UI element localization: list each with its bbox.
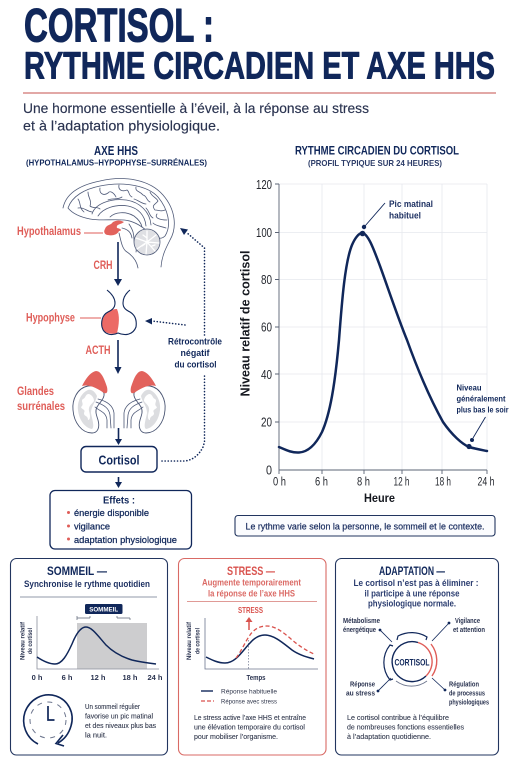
badge: sommeil: SOMMEIL: [89, 607, 118, 614]
subtitle: Une hormone essentielle à l’éveil, à la réponse au stress: [23, 100, 369, 116]
left kidney: [73, 371, 114, 433]
text: adaptation: Le cortisol contribue à l’équilibre: [347, 713, 449, 722]
line chart: cortisol 24 h: 100: [256, 226, 272, 240]
heading: rythme circadien: [295, 144, 459, 168]
line chart: cortisol 24 h: 0 h: [273, 476, 286, 488]
icon: pituitary gland: [102, 290, 136, 335]
heading: adaptation: ADAPTATION —: [379, 564, 445, 578]
line chart: sommeil: 12 h: [90, 673, 106, 682]
heading: axe HHS: [26, 144, 207, 168]
line chart: cortisol 24 h: 12 h: [394, 476, 410, 488]
line chart: stress: Temps: [246, 673, 266, 682]
heading: stress: la réponse de l’axe HHS: [208, 588, 295, 598]
panel: rythme circadien: [235, 144, 509, 536]
line chart: cortisol 24 h: 20: [261, 416, 272, 430]
heading: axe HHS: (HYPOTHALAMUS–HYPOPHYSE–SURRÉNALES): [26, 158, 207, 168]
line chart: sommeil: 6 h: [62, 673, 73, 682]
heading: sommeil: Synchronise le rythme quotidien: [24, 579, 150, 589]
text: adaptation: de nombreuses fonctions essentielles: [347, 722, 464, 732]
label: glandes surrénales: [17, 384, 65, 413]
labels: functions: au stress: [346, 690, 375, 698]
label: rétrocontrôle: négatif: [180, 348, 210, 359]
line chart: sommeil: 24 h: [147, 673, 163, 682]
line chart: cortisol 24 h: 8 h: [357, 476, 370, 488]
heading: stress: [202, 564, 301, 598]
text: stress: [194, 713, 306, 741]
box: effets: énergie disponible: [74, 508, 149, 519]
arrow: negative feedback: [145, 228, 204, 461]
text: stress: pour mobiliser l’organisme.: [194, 732, 278, 741]
label: hypophyse: Hypophyse: [26, 312, 75, 324]
label: rétrocontrôle: [168, 336, 222, 370]
legend: stress: [201, 688, 278, 706]
labels: functions: et attention: [453, 627, 485, 634]
panel: sommeil: [10, 558, 168, 755]
line chart: sommeil: de cortisol: [27, 628, 34, 654]
line chart: cortisol 24 h: [256, 178, 494, 488]
panel: adaptation: [336, 558, 498, 755]
diagram: cortisol ring: CORTISOL: [394, 658, 430, 668]
legend: stress: Réponse habituelle: [221, 688, 277, 696]
box: cortisol: Cortisol: [98, 454, 140, 468]
box: effets: [50, 490, 192, 549]
y axis title: Niveau relatif de cortisol: [238, 250, 252, 396]
text: sommeil: la nuit.: [85, 730, 107, 740]
diagram: cortisol ring: [384, 633, 437, 686]
heading: rythme circadien: RYTHME CIRCADIEN DU CORTISOL: [295, 144, 459, 158]
note box: [235, 516, 495, 536]
labels: functions: énergétique: [343, 627, 376, 634]
line chart: cortisol 24 h: 40: [261, 368, 272, 382]
box: effets: vigilance: [74, 522, 110, 532]
connectors: [377, 622, 450, 692]
x axis title: Heure: [364, 493, 395, 505]
label and arrow: stress: [238, 605, 263, 630]
heading: stress: STRESS —: [227, 564, 275, 578]
line chart: stress: de cortisol: [194, 628, 202, 654]
panel: stress: [178, 558, 326, 755]
heading: sommeil: SOMMEIL —: [47, 564, 107, 578]
labels: functions: de processus: [449, 690, 485, 698]
labels: functions: Métabolisme: [343, 618, 380, 625]
line chart: sommeil: Niveau relatif: [20, 621, 26, 660]
heading: rythme circadien: (PROFIL TYPIQUE SUR 24 HEURES): [308, 158, 442, 168]
box: effets: adaptation physiologique: [74, 535, 177, 546]
line chart: cortisol 24 h: 120: [256, 178, 272, 192]
arrow: adrenals to cortisol: [115, 428, 122, 445]
heading: stress: Augmente temporairement: [202, 578, 301, 588]
arrow: cortisol to effects: [115, 477, 122, 488]
title: [24, 0, 495, 88]
labels: functions: Régulation: [449, 682, 479, 688]
text: sommeil: Un sommeil régulier: [85, 702, 141, 711]
callout: pic matinal: Pic matinal: [389, 199, 433, 209]
line chart: cortisol 24 h: 80: [261, 273, 272, 287]
line chart: sommeil: [20, 616, 163, 682]
label: glandes surrénales: Glandes: [17, 384, 54, 398]
text: adaptation: [347, 713, 464, 741]
right kidney: [124, 371, 165, 433]
line chart: cortisol 24 h: 60: [261, 320, 272, 334]
panel: axe HHS: [17, 144, 222, 549]
arrow: pituitary to adrenals: [114, 340, 122, 374]
icon: brain: [63, 179, 174, 268]
callout: pic matinal: [362, 199, 433, 229]
heading: sommeil: [24, 564, 150, 589]
icon: kidneys and adrenal glands: [73, 371, 165, 433]
line chart: cortisol 24 h: 18 h: [435, 476, 451, 488]
line chart: sommeil: 18 h: [122, 673, 138, 682]
heading: adaptation: Le cortisol n’est pas à éliminer :: [354, 578, 478, 588]
label: CRH: CRH: [94, 260, 112, 272]
labels: functions: Réponse: [350, 682, 375, 688]
box: cortisol: [81, 446, 157, 472]
arrow: hypothalamus to pituitary: [114, 242, 122, 286]
label: rétrocontrôle: du cortisol: [174, 360, 216, 370]
line chart: cortisol 24 h: 6 h: [315, 476, 328, 488]
text: sommeil: favorise un pic matinal: [85, 712, 153, 720]
labels: functions: [343, 618, 489, 706]
heading: adaptation: il participe à une réponse: [364, 588, 460, 598]
callout: niveau du soir: Niveau: [456, 382, 482, 392]
heading: adaptation: physiologique normale.: [368, 598, 456, 608]
heading: adaptation: [354, 564, 478, 608]
labels: functions: physiologiques: [449, 700, 489, 706]
line chart: sommeil: 0 h: [32, 673, 43, 682]
callout: niveau du soir: [456, 382, 509, 442]
line chart: cortisol 24 h: 0: [266, 464, 272, 478]
text: stress: Le stress active l’axe HHS et entraîne: [194, 713, 306, 722]
label and arrow: stress: STRESS: [238, 605, 263, 615]
callout: pic matinal: habituel: [389, 210, 421, 220]
text: sommeil: et des niveaux plus bas: [85, 721, 156, 730]
line chart: stress: [186, 618, 318, 682]
label: ACTH: ACTH: [86, 345, 110, 357]
line chart: stress: Niveau relatif: [186, 621, 193, 660]
callout: niveau du soir: généralement: [456, 394, 506, 404]
heading: axe HHS: AXE HHS: [94, 144, 138, 158]
cerebellum: [134, 229, 160, 255]
label: glandes surrénales: surrénales: [17, 399, 65, 413]
label: hypothalamus: Hypothalamus: [17, 226, 81, 238]
badge: sommeil: [77, 604, 130, 620]
line chart: cortisol 24 h: 24 h: [478, 476, 494, 488]
icon: clock: [24, 695, 72, 746]
text: stress: une élévation temporaire du cortisol: [194, 722, 305, 732]
note box: Le rythme varie selon la personne, le sommeil et le contexte.: [246, 522, 484, 532]
labels: functions: Vigilance: [455, 618, 480, 625]
box: effets: Effets :: [103, 496, 135, 506]
text: adaptation: à l’adaptation quotidienne.: [347, 732, 431, 741]
title: CORTISOL :: [24, 0, 214, 52]
legend: stress: Réponse avec stress: [221, 698, 278, 706]
subtitle: et à l’adaptation physiologique.: [23, 118, 220, 134]
text: sommeil: [85, 702, 156, 740]
hypothalamus: [104, 220, 124, 235]
subtitle: [23, 100, 369, 134]
label: rétrocontrôle: Rétrocontrôle: [168, 336, 222, 348]
